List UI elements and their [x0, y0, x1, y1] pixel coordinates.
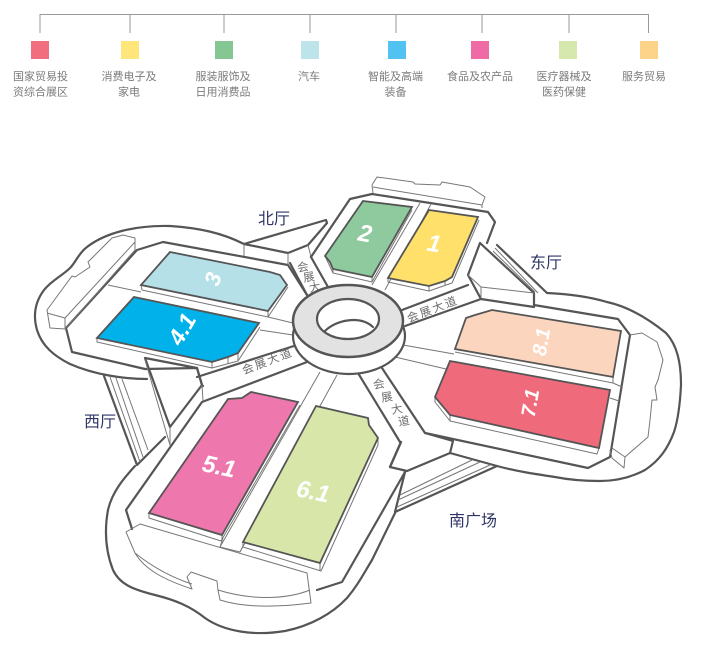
road label: 会展大道 south-east: 展	[380, 390, 394, 405]
hall 6.1	[243, 406, 378, 571]
legend item: 食品及农产品: 食品及农产品	[447, 69, 513, 83]
label: 西厅: 西厅	[84, 414, 116, 431]
legend item: 服装服饰及日用消费品: 服装服饰及	[196, 69, 250, 83]
north-west triangle and north hall wall	[244, 220, 327, 265]
hall 7.1	[435, 361, 610, 454]
outer contour: east hall	[450, 293, 681, 481]
west steps and block	[104, 358, 203, 465]
label: 东厅: 东厅	[530, 254, 562, 272]
legend item: 国家贸易投资综合展区: 资综合展区	[13, 84, 68, 98]
hall 2	[325, 201, 412, 282]
hall 4.1	[97, 297, 260, 368]
road label: 会展大道 south-west: 会展大道	[240, 345, 295, 377]
legend item: 国家贸易投资综合展区: 国家贸易投	[13, 69, 68, 83]
south building outline	[126, 345, 405, 590]
hall 3: 3	[199, 269, 227, 289]
hall 2: 2	[355, 219, 375, 249]
south plaza	[126, 524, 311, 606]
road label: 会展大 north-west: 展	[302, 270, 316, 285]
legend item: 国家贸易投资综合展区	[13, 41, 68, 98]
hall 3	[141, 252, 288, 317]
south-east steps	[390, 433, 497, 512]
west building outline	[66, 242, 307, 386]
road label: 会展大道 south-east	[372, 377, 411, 429]
north plaza	[372, 177, 485, 208]
hall 7.1: 7.1	[518, 387, 544, 419]
hall 5.1	[149, 392, 300, 541]
west plaza	[47, 235, 135, 329]
east plaza	[610, 333, 663, 468]
legend item: 智能及高端装备: 智能及高端	[368, 69, 423, 83]
hall 4.1: 4.1	[162, 309, 201, 350]
legend item: 汽车	[298, 41, 320, 83]
label: 南广场: 南广场	[449, 512, 497, 530]
hall 1	[388, 210, 479, 291]
road label: 会展大 north-west: 大	[308, 279, 322, 295]
road label: 会展大道 north-east: 会展大道	[405, 293, 460, 325]
legend item: 服务贸易: 服务贸易	[622, 70, 666, 83]
legend item: 智能及高端装备	[368, 41, 423, 98]
legend item: 消费电子及家电	[102, 41, 156, 98]
east road lines	[395, 345, 622, 401]
west road lines	[108, 285, 293, 335]
legend item: 消费电子及家电: 消费电子及	[102, 69, 156, 83]
legend item: 消费电子及家电: 家电	[118, 84, 140, 98]
east building outline	[358, 285, 630, 468]
legend item: 医疗器械及医药保健: 医疗器械及	[536, 69, 592, 83]
legend item: 服务贸易	[622, 41, 666, 83]
floor plan	[35, 177, 681, 633]
legend item: 医疗器械及医药保健: 医药保健	[542, 84, 586, 98]
legend item: 汽车: 汽车	[298, 69, 320, 83]
east steps and block	[468, 243, 547, 307]
north hall building	[290, 194, 495, 295]
road label: 会展大道 south-east: 大	[390, 401, 404, 417]
hall 8.1	[455, 310, 621, 383]
road label: 会展大道 south-east: 会	[372, 377, 386, 392]
road label: 会展大 north-west	[296, 260, 322, 295]
hall 8.1: 8.1	[529, 326, 555, 358]
hall 1: 1	[425, 230, 443, 258]
hall 5.1: 5.1	[200, 450, 238, 484]
outer contour: south hall	[106, 466, 396, 633]
road lines between halls 5.1 and 6.1	[220, 372, 337, 552]
legend item: 食品及农产品	[447, 41, 513, 83]
legend	[13, 14, 666, 98]
road label: 会展大 north-west: 会	[296, 260, 310, 275]
outer contour: west hall	[35, 226, 244, 379]
legend item: 服装服饰及日用消费品: 日用消费品	[196, 84, 250, 98]
legend item: 医疗器械及医药保健	[536, 41, 592, 98]
central ring	[293, 285, 405, 374]
road label: 会展大道 south-east: 道	[397, 413, 411, 429]
legend item: 服装服饰及日用消费品	[196, 41, 250, 98]
legend connector lines	[40, 14, 648, 33]
hall 6.1: 6.1	[294, 475, 332, 509]
label: 北厅: 北厅	[258, 210, 290, 228]
legend item: 智能及高端装备: 装备	[384, 84, 406, 98]
